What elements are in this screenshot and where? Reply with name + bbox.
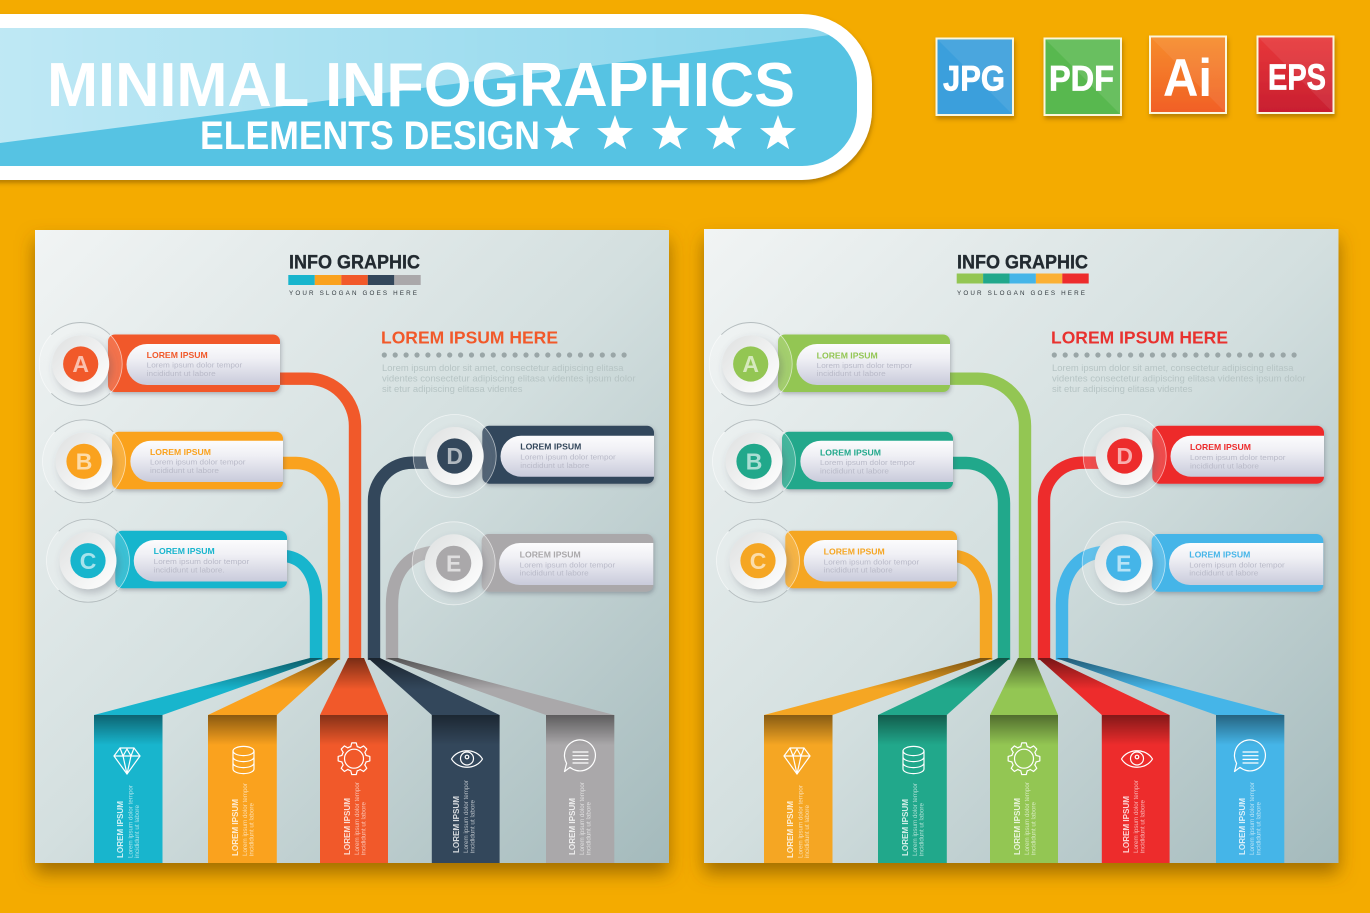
card B: incididunt ut labore (820, 466, 889, 475)
ribbon label B: Lorem ipsum dolor tempor (243, 783, 249, 856)
badge: Ai: Ai (1163, 49, 1212, 108)
card B: incididunt ut labore (150, 466, 219, 475)
card E: E (446, 550, 461, 576)
card D: incididunt ut labore (1190, 461, 1259, 470)
card D: D (1116, 443, 1133, 469)
card B: B (746, 448, 762, 474)
card A: Lorem ipsum dolor tempor (817, 361, 913, 370)
banner subtitle: ELEMENTS DESIGN (200, 114, 540, 158)
card D (1083, 414, 1324, 498)
card B (712, 420, 953, 503)
card E: Lorem ipsum dolor tempor (1189, 560, 1285, 569)
text block: lorem ipsum here: sit etur adipiscing elitasa videntes (382, 383, 523, 394)
card B: Lorem ipsum dolor tempor (150, 458, 246, 467)
heading: info graphic: YOUR SLOGAN GOES HERE (957, 290, 1085, 297)
icon: diamond (784, 748, 810, 774)
card C: incididunt ut labore. (154, 565, 225, 574)
icon: eye (1122, 751, 1152, 767)
card E: Lorem ipsum dolor tempor (520, 560, 616, 569)
icon: chat bubble (564, 740, 595, 772)
ribbon label D: Lorem ipsum dolor tempor (464, 780, 470, 853)
ribbon label E: Lorem ipsum dolor tempor (580, 782, 586, 855)
heading: info graphic: YOUR SLOGAN GOES HERE (289, 290, 417, 297)
card A: LOREM IPSUM (817, 350, 878, 360)
badge: EPS (1258, 36, 1334, 113)
card A: incididunt ut labore (817, 369, 886, 378)
ribbon label D: incididunt ut labore (1140, 799, 1146, 853)
card A: LOREM IPSUM (147, 350, 208, 360)
ribbon label D: LOREM IPSUM (451, 796, 461, 853)
text block: lorem ipsum here: LOREM IPSUM HERE (381, 327, 558, 347)
ribbon label B: LOREM IPSUM (230, 799, 240, 856)
icon: diamond (114, 748, 140, 774)
card B: B (76, 448, 92, 474)
card D: Lorem ipsum dolor tempor (1190, 453, 1286, 462)
icon: eye (452, 751, 482, 767)
card B: Lorem ipsum dolor tempor (820, 458, 916, 467)
text block: lorem ipsum here: Lorem ipsum dolor sit amet, consectetur adipiscing elitasa (382, 362, 624, 373)
card E (1082, 522, 1323, 605)
rating stars (544, 115, 796, 149)
ribbon label C: LOREM IPSUM (115, 801, 125, 858)
heading: info graphic: INFO GRAPHIC (289, 252, 420, 273)
card E: incididunt ut labore (1189, 569, 1258, 578)
text block: lorem ipsum here: sit etur adipiscing elitasa videntes (1052, 383, 1193, 394)
card C: Lorem ipsum dolor tempor (824, 557, 920, 566)
badge: Ai (1150, 36, 1226, 113)
ribbon label E: LOREM IPSUM (1237, 798, 1247, 855)
ribbon label A: Lorem ipsum dolor tempor (355, 782, 361, 855)
card C: LOREM IPSUM (824, 546, 885, 556)
ribbon label B: LOREM IPSUM (900, 799, 910, 856)
ribbon label E (1237, 782, 1262, 855)
card C: C (80, 548, 96, 574)
ribbon: A (320, 658, 388, 863)
text block: lorem ipsum here: Lorem ipsum dolor sit amet, consectetur adipiscing elitasa (1052, 362, 1294, 373)
ribbon: D (368, 658, 500, 863)
card A: A (72, 351, 89, 377)
ribbon label A: LOREM IPSUM (342, 798, 352, 855)
ribbon label C: incididunt ut labore (135, 804, 141, 858)
card A (39, 322, 280, 406)
text block: lorem ipsum here: videntes consectetur adipiscing elitasa videntes ipsum dolor (1052, 372, 1306, 384)
card C: Lorem ipsum dolor tempor (154, 557, 250, 566)
card D: D (446, 443, 463, 469)
card E: LOREM IPSUM (520, 550, 581, 560)
badge: PDF (1044, 38, 1121, 115)
ribbon label B: incididunt ut labore (250, 802, 256, 856)
card D (413, 414, 654, 498)
ribbon label B: incididunt ut labore (920, 802, 926, 856)
ribbon label A: Lorem ipsum dolor tempor (1025, 782, 1031, 855)
ribbon: D (1038, 658, 1170, 863)
ribbon label E (567, 782, 592, 855)
ribbon: B (208, 658, 340, 863)
card E: incididunt ut labore (520, 569, 589, 578)
ribbon label C (785, 785, 811, 858)
card A (709, 322, 950, 406)
icon: coins (903, 746, 924, 774)
card D: LOREM IPSUM (520, 442, 581, 452)
card C: C (750, 548, 766, 574)
connector lines (278, 379, 432, 660)
icon: gear (338, 743, 370, 775)
heading: info graphic (957, 252, 1089, 297)
badge: JPG: JPG (943, 60, 1005, 98)
card D: Lorem ipsum dolor tempor (520, 452, 616, 462)
card E: E (1116, 550, 1131, 576)
ribbon label A: LOREM IPSUM (1012, 798, 1022, 855)
ribbon label C: Lorem ipsum dolor tempor (128, 785, 134, 858)
card B (42, 420, 283, 503)
ribbon: E (386, 658, 614, 863)
ribbon label A: incididunt ut labore (362, 801, 368, 855)
ribbon: B (878, 658, 1010, 863)
ribbon: C (764, 658, 993, 863)
ribbon label C: LOREM IPSUM (785, 801, 795, 858)
heading: info graphic: INFO GRAPHIC (957, 252, 1088, 273)
card B: LOREM IPSUM (150, 447, 211, 457)
ribbon label E: incididunt ut labore (1256, 801, 1262, 855)
card E (412, 522, 653, 605)
icon: gear (1008, 743, 1040, 775)
ribbon label D (1121, 780, 1146, 853)
ribbon label B: Lorem ipsum dolor tempor (913, 783, 919, 856)
card D: LOREM IPSUM (1190, 442, 1251, 452)
panel: left infographic (35, 230, 669, 863)
ribbon label A: incididunt ut labore (1032, 801, 1038, 855)
ribbon label D: incididunt ut labore (470, 799, 476, 853)
ribbon label D: Lorem ipsum dolor tempor (1134, 780, 1140, 853)
card A: A (742, 351, 759, 377)
ribbon: E (1056, 658, 1284, 863)
text block: lorem ipsum here (381, 327, 636, 394)
ribbon label A (1012, 782, 1038, 855)
badge: PDF: PDF (1049, 60, 1114, 98)
ribbon: C (94, 658, 323, 863)
ribbon label E: Lorem ipsum dolor tempor (1250, 782, 1256, 855)
icon: coins (233, 746, 254, 774)
card A: Lorem ipsum dolor tempor (147, 361, 243, 370)
badge: JPG (936, 38, 1013, 115)
icon: chat bubble (1234, 740, 1265, 772)
ribbon label D (451, 780, 476, 853)
banner (0, 14, 872, 180)
ribbon label B (900, 783, 926, 856)
connector lines (948, 379, 1102, 660)
ribbon label C: incididunt ut labore (805, 804, 811, 858)
ribbon label B (230, 783, 256, 856)
ribbon label D: LOREM IPSUM (1121, 796, 1131, 853)
ribbon label C (115, 785, 141, 858)
ribbon label C: Lorem ipsum dolor tempor (798, 785, 804, 858)
text block: lorem ipsum here (1051, 327, 1306, 394)
card C (46, 519, 287, 602)
card B: LOREM IPSUM (820, 447, 881, 457)
panel: right infographic (704, 229, 1338, 863)
card D: incididunt ut labore (520, 461, 589, 470)
card A: incididunt ut labore (147, 369, 216, 378)
ribbon label E: LOREM IPSUM (567, 798, 577, 855)
ribbon label A (342, 782, 368, 855)
badge: EPS: EPS (1268, 56, 1326, 98)
card C: incididunt ut labore (824, 566, 893, 574)
text block: lorem ipsum here: LOREM IPSUM HERE (1051, 327, 1228, 347)
card C (716, 519, 957, 602)
banner title: MINIMAL INFOGRAPHICS (47, 51, 795, 120)
ribbon label E: incididunt ut labore (586, 801, 592, 855)
card E: LOREM IPSUM (1189, 550, 1250, 560)
text block: lorem ipsum here: videntes consectetur adipiscing elitasa videntes ipsum dolor (382, 372, 636, 384)
ribbon: A (990, 658, 1058, 863)
card C: LOREM IPSUM (154, 546, 215, 556)
heading: info graphic (288, 252, 421, 297)
